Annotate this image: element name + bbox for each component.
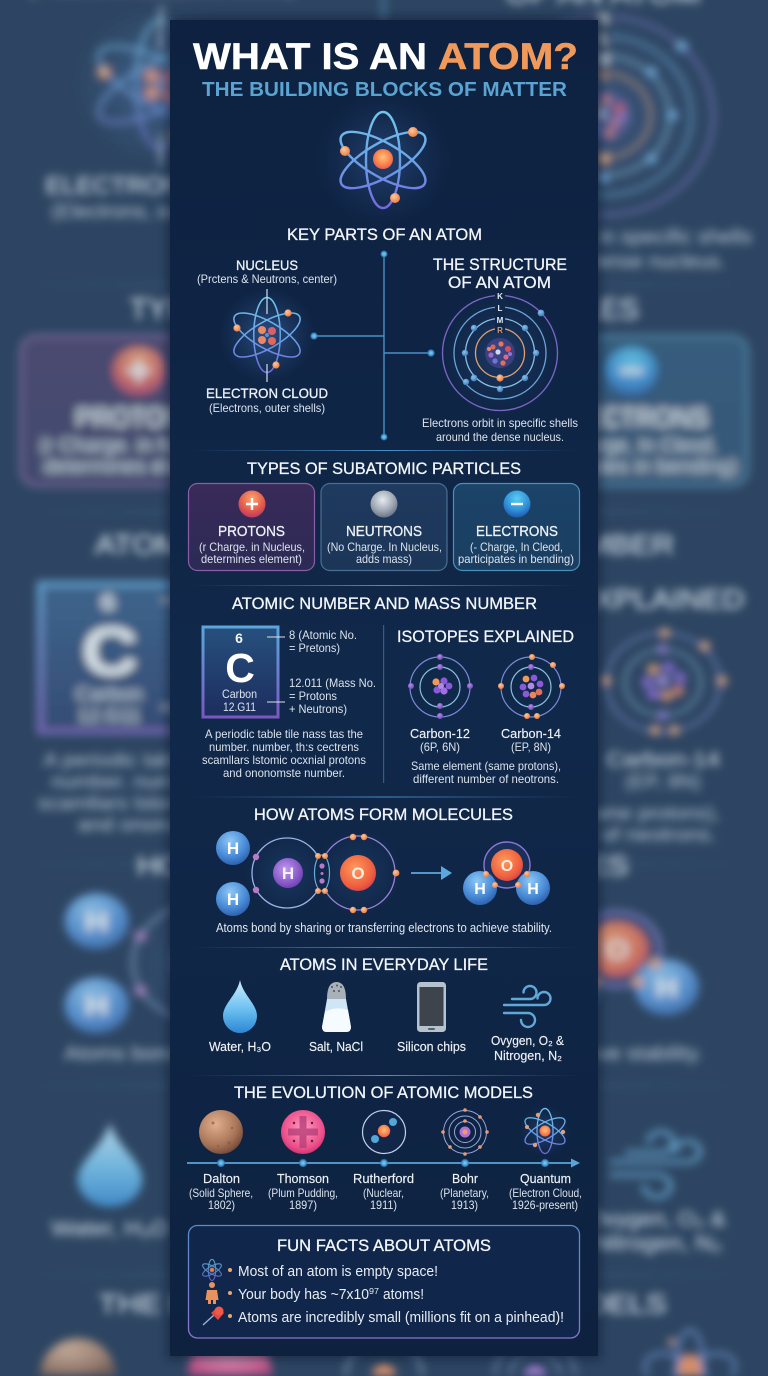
panel: fun facts <box>188 1226 580 1338</box>
text: periodic table explanation: and ononomste number. <box>223 766 345 780</box>
card: neutrons: adds mass) <box>356 552 412 566</box>
labels: isotope names: (EP, 8N) <box>511 740 551 754</box>
fact: atoms in your body: Your body has ~7x10 <box>238 1287 369 1303</box>
periodic tile: carbon: Carbon <box>222 687 257 701</box>
diagram: water molecule: H <box>474 881 486 898</box>
heading: molecules: HOW ATOMS FORM MOLECULES <box>254 805 513 824</box>
card: protons: determines element) <box>201 552 302 566</box>
diagram: water molecule: H <box>527 881 539 898</box>
labels: everyday examples: Salt, NaCl <box>309 1039 363 1054</box>
diagram: electron shells: M <box>497 316 504 325</box>
title: ATOM? <box>438 36 578 77</box>
periodic tile: carbon: C <box>225 645 255 691</box>
icon: hero atom <box>315 90 451 226</box>
labels: Rutherford <box>353 1171 414 1212</box>
card: neutrons: (No Charge. In Nucleus, <box>327 540 442 554</box>
card: electrons: participates in bending) <box>458 552 574 566</box>
labels: isotope names: Carbon-14 <box>501 726 561 741</box>
caption: isotopes: Same element (same protons), <box>411 759 561 773</box>
icon: water drop <box>223 980 257 1033</box>
labels: Quantum: Quantum <box>520 1171 571 1186</box>
diagram: water molecule <box>463 842 550 905</box>
panel: main infographic <box>170 20 598 1356</box>
label: electron cloud: ELECTRON CLOUD <box>206 385 328 401</box>
card: protons: (r Charge. in Nucleus, <box>199 540 305 554</box>
caption: electron shells <box>422 416 578 444</box>
label: nucleus: (Prctens & Neutrons, center) <box>197 272 337 286</box>
heading: isotopes explained: ISOTOPES EXPLAINED <box>397 627 574 646</box>
labels: Thomson: (Plum Pudding, <box>268 1186 338 1200</box>
caption: electron shells: Electrons orbit in specific shells <box>422 416 578 430</box>
labels: Bohr <box>440 1171 489 1212</box>
section: evolution of atomic models <box>187 1083 582 1212</box>
labels: Thomson <box>268 1171 338 1212</box>
labels: Dalton: (Solid Sphere, <box>189 1186 253 1200</box>
heading: atomic number and mass number: ATOMIC NUMBER AND MASS NUMBER <box>232 594 537 613</box>
labels: Bohr: 1913) <box>451 1198 478 1212</box>
labels: Dalton: 1802) <box>208 1198 235 1212</box>
labels: Thomson: Thomson <box>277 1171 329 1186</box>
periodic tile: carbon: 6 <box>235 630 243 646</box>
title <box>193 36 578 77</box>
labels: Quantum <box>509 1171 582 1212</box>
label: electron cloud: (Electrons, outer shells) <box>209 401 325 415</box>
card: neutrons: NEUTRONS <box>346 523 422 540</box>
diagram: atoms sharing electrons: H <box>227 839 239 858</box>
section: how atoms form molecules <box>190 805 580 948</box>
title: WHAT IS AN <box>193 36 427 77</box>
label: nucleus <box>197 257 337 286</box>
heading: key parts: KEY PARTS OF AN ATOM <box>287 225 482 244</box>
periodic tile: carbon <box>203 627 278 717</box>
caption: isotopes: different number of neotrons. <box>413 772 559 786</box>
diagram: atoms sharing electrons <box>216 829 402 917</box>
label: nucleus: NUCLEUS <box>236 257 298 273</box>
text: periodic table explanation <box>202 727 366 780</box>
icon: person <box>206 1282 218 1304</box>
heading: fun facts: FUN FACTS ABOUT ATOMS <box>277 1236 491 1255</box>
labels: isotope names: (6P, 6N) <box>420 740 460 754</box>
icon: pin <box>203 1306 224 1325</box>
labels: Rutherford: (Nuclear, <box>363 1186 404 1200</box>
labels: Rutherford: 1911) <box>370 1198 397 1212</box>
diagram: atoms sharing electrons: O <box>351 864 365 883</box>
icon: Quantum model <box>519 1105 571 1157</box>
labels: Quantum: 1926-present) <box>512 1198 578 1212</box>
heading: structure of an atom: OF AN ATOM <box>448 273 551 292</box>
icon: Bohr planetary model <box>441 1108 489 1156</box>
labels: everyday examples: Silicon chips <box>397 1039 466 1054</box>
section: atoms in everyday life <box>190 955 580 1076</box>
labels: Rutherford: Rutherford <box>353 1171 414 1186</box>
fact: atoms in your body: 97 <box>369 1286 379 1296</box>
arrow: reaction <box>411 866 452 880</box>
periodic tile: carbon: 12.G11 <box>223 700 256 714</box>
fact: atoms in your body: atoms! <box>383 1287 424 1303</box>
fact: pinhead: Atoms are incredibly small (millions fit on a pinhead)! <box>238 1310 564 1326</box>
heading: evolution: THE EVOLUTION OF ATOMIC MODELS <box>234 1083 533 1102</box>
card: neutrons <box>321 484 447 570</box>
diagram: electron shells: L <box>498 304 503 313</box>
subtitle: THE BUILDING BLOCKS OF MATTER <box>202 79 568 101</box>
fact: empty space: Most of an atom is empty space! <box>238 1264 438 1280</box>
heading: structure of an atom: THE STRUCTURE <box>433 255 567 274</box>
connector lines <box>310 250 435 441</box>
callouts: atomic and mass numbers: 8 (Atomic No. <box>289 628 357 642</box>
labels: Bohr: Bohr <box>452 1171 479 1186</box>
diagram: electron shells: R <box>497 326 503 335</box>
caption: molecules: Atoms bond by sharing or transferring electrons to achieve stability. <box>216 921 552 935</box>
icon: phone <box>417 982 446 1032</box>
heading: structure of an atom <box>433 255 567 292</box>
labels: isotope names <box>410 726 561 754</box>
labels: everyday examples: Water, H₃O <box>209 1039 271 1054</box>
text: periodic table explanation: scamllars lstomic ocxnial protons <box>202 753 366 767</box>
labels: everyday examples: Ovygen, O₂ & <box>491 1033 564 1048</box>
icon: Dalton sphere <box>199 1110 243 1154</box>
fact: atoms in your body <box>228 1286 424 1303</box>
diagram: electron shells <box>438 291 562 415</box>
section: key parts of an atom <box>190 225 580 451</box>
heading: types of subatomic particles: TYPES OF SUBATOMIC PARTICLES <box>247 459 521 478</box>
labels: Bohr: (Planetary, <box>440 1186 489 1200</box>
section: subatomic particles <box>188 459 580 586</box>
callouts: atomic and mass numbers: 12.011 (Mass No. <box>289 676 376 690</box>
card: electrons: ELECTRONS <box>476 523 558 540</box>
labels: everyday examples: Nitrogen, N₂ <box>494 1048 562 1063</box>
card: electrons: (- Charge, In Cleod, <box>470 540 563 554</box>
diagram: atoms sharing electrons: H <box>282 864 294 883</box>
icon: small atom <box>201 1259 223 1281</box>
icon: small atom with nucleus <box>219 287 315 383</box>
label: electron cloud <box>206 385 328 415</box>
card: protons <box>188 484 314 570</box>
card: protons: PROTONS <box>218 523 285 540</box>
diagram: water molecule: O <box>501 858 513 875</box>
text: periodic table explanation: number. number, th:s cectrens <box>209 740 359 754</box>
labels: isotope names: Carbon-12 <box>410 726 470 741</box>
diagram: atoms sharing electrons: H <box>227 890 239 909</box>
labels: Dalton: Dalton <box>203 1171 240 1186</box>
card: electrons <box>454 484 580 570</box>
labels: Quantum: (Electron Cloud, <box>509 1186 582 1200</box>
text: periodic table explanation: A periodic table tile nass tas the <box>205 727 363 741</box>
icon: wind <box>504 986 551 1027</box>
labels: Thomson: 1897) <box>289 1198 317 1212</box>
icon: Rutherford nuclear model <box>362 1110 406 1154</box>
timeline <box>187 1158 580 1168</box>
heading: everyday life: ATOMS IN EVERYDAY LIFE <box>280 955 488 974</box>
caption: electron shells: around the dense nucleus. <box>436 430 564 444</box>
labels: everyday examples <box>209 1033 564 1063</box>
caption: isotopes <box>411 759 561 786</box>
diagram: electron shells: K <box>497 292 503 301</box>
callouts: atomic and mass numbers: = Protons <box>289 689 337 703</box>
callouts: atomic and mass numbers: = Pretons) <box>289 641 340 655</box>
icon: Thomson plum pudding <box>281 1110 325 1154</box>
callouts: atomic and mass numbers: + Neutrons) <box>289 702 347 716</box>
diagram: carbon-12 <box>408 654 473 719</box>
section: atomic number and isotopes <box>190 594 580 798</box>
icon: salt shaker <box>322 982 351 1032</box>
labels: Dalton <box>189 1171 253 1212</box>
callouts: atomic and mass numbers <box>267 628 376 716</box>
diagram: carbon-14 <box>498 654 565 719</box>
